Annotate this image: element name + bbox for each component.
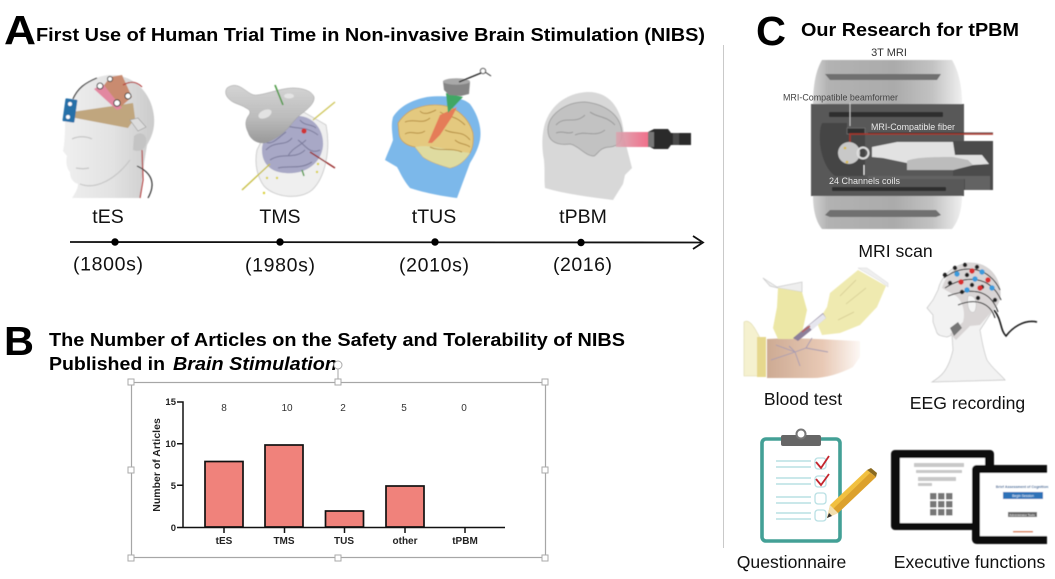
x axis labels: TUS <box>334 536 354 547</box>
value labels: 2 <box>340 403 346 414</box>
labels: method names <box>92 206 607 228</box>
letter B: B <box>4 318 34 364</box>
bar chart: articles per modality <box>151 397 505 547</box>
value labels: 10 <box>281 403 293 414</box>
axes and ticks <box>177 402 505 533</box>
bars <box>205 445 424 527</box>
x axis labels <box>216 536 478 547</box>
x axis labels: tPBM <box>452 536 478 547</box>
heading: our research: Our Research for tPBM <box>801 19 1019 40</box>
labels: years <box>73 254 612 276</box>
icon: tPBM head with light source <box>542 92 691 200</box>
labels: years: (2010s) <box>399 254 469 276</box>
letter A: A <box>4 7 36 53</box>
y axis labels: 0 <box>171 523 176 534</box>
x axis labels: TMS <box>273 536 295 547</box>
y axis labels: 15 <box>165 397 177 408</box>
panel: B bar chart <box>4 318 625 561</box>
y axis labels: 10 <box>165 439 176 450</box>
icon: EEG cap <box>927 263 1037 382</box>
x axis labels: tES <box>216 536 233 547</box>
icon: tTUS transducer over head <box>385 68 491 198</box>
icon: tablets with executive function tasks <box>891 450 1048 544</box>
labels: method names: TMS <box>259 206 301 228</box>
icon: tablets with executive function tasks: Begin Session <box>1012 494 1034 498</box>
panel: A timeline <box>4 7 705 276</box>
labels: method names: tTUS <box>412 206 456 228</box>
heading: number of articles: The Number of Articles on the Safety and Tolerability of NIBS <box>49 329 625 350</box>
label: EEG recording: EEG recording <box>910 393 1025 413</box>
chart selection frame <box>128 361 548 561</box>
value labels: 0 <box>461 403 467 414</box>
y axis title: Number of Articles <box>151 418 163 512</box>
labels: MRI annotations: MRI-Compatible fiber <box>871 122 955 132</box>
letter C: C <box>756 8 786 54</box>
y axis labels <box>165 397 177 534</box>
labels: MRI annotations: 24 Channels coils <box>829 176 901 186</box>
labels: years: (1980s) <box>245 254 315 276</box>
heading: number of articles: Published in <box>49 353 165 374</box>
icon: TMS coil over brain <box>226 85 335 196</box>
label: questionnaire: Questionnaire <box>737 552 846 572</box>
label: MRI scan: MRI scan <box>858 241 933 261</box>
icon: tablets with executive function tasks: Administrator Tools <box>1009 513 1035 517</box>
labels: years: (2016) <box>553 254 612 276</box>
icon: blood test <box>744 268 888 378</box>
icon: clipboard questionnaire <box>762 430 877 541</box>
heading: first use timeline: First Use of Human Trial Time in Non-invasive Brain Stimulation (NIBS) <box>36 24 705 45</box>
y axis labels: 5 <box>171 481 177 492</box>
labels: years: (1800s) <box>73 254 143 276</box>
chart: timeline axis <box>70 236 703 249</box>
heading: number of articles <box>49 329 625 374</box>
panel: C our research <box>737 8 1048 572</box>
icon: tES head with electrodes <box>62 75 154 198</box>
icon: MRI scanner with patient <box>811 60 993 229</box>
heading: number of articles: Brain Stimulation <box>173 353 337 374</box>
labels: MRI annotations <box>783 92 955 186</box>
value labels <box>221 403 467 414</box>
label: 3T MRI: 3T MRI <box>871 47 907 59</box>
icon: tablets with executive function tasks: Brief Assessment of Cognition <box>996 485 1048 489</box>
labels: method names: tPBM <box>559 206 607 228</box>
x axis labels: other <box>392 536 418 547</box>
label: blood test: Blood test <box>764 389 842 409</box>
labels: MRI annotations: MRI-Compatible beamformer <box>783 92 898 102</box>
divider <box>722 45 724 548</box>
labels: method names: tES <box>92 206 124 228</box>
value labels: 8 <box>221 403 227 414</box>
label: executive functions: Executive functions <box>894 552 1045 572</box>
value labels: 5 <box>401 403 407 414</box>
